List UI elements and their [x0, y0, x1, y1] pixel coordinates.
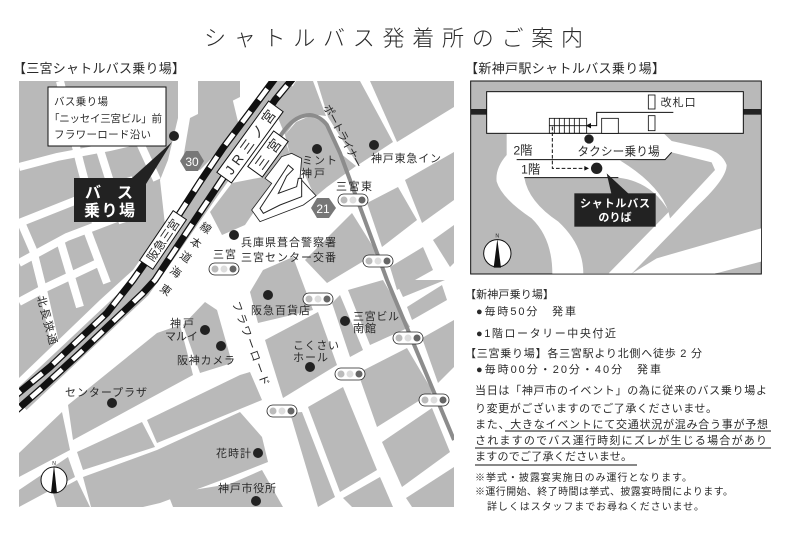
shuttle stop label: シャトルバス — [580, 197, 650, 210]
map labels: ポートライナー — [320, 102, 365, 170]
label: 1st floor: 1階 — [521, 163, 540, 177]
map labels: 神戸市役所 — [218, 481, 276, 495]
map labels: 三宮センター交番 — [241, 251, 336, 264]
callout: bus stop address: フラワーロード沿い — [54, 129, 151, 141]
label: 2nd floor: 2階 — [513, 143, 533, 157]
compass: Sannomiya map: N — [52, 461, 56, 467]
underlines — [475, 431, 771, 465]
shuttle stop label: のりば — [598, 210, 632, 224]
route shield 30: 30 — [185, 155, 199, 169]
text block: timetable and notes: ※運行開始、終了時間は挙式、披露宴時間によります。 — [475, 485, 733, 498]
text block: timetable and notes: 詳しくはスタッフまでお尋ねくださいませ。 — [487, 500, 704, 513]
bus stop label: 乗り場 — [84, 202, 135, 220]
text block: timetable and notes: 【三宮乗り場】各三宮駅より北側へ徒歩 2 分 — [465, 346, 702, 360]
text block: timetable and notes: 当日は「神戸市のイベント」の為に従来のバス乗り場よ — [475, 383, 767, 397]
route arrow: stairs to bus stop — [552, 127, 589, 171]
bus stop label: バ ス — [85, 185, 133, 202]
map labels: 神戸 — [301, 166, 325, 180]
title: シャトルバス発着所のご案内 — [204, 26, 583, 51]
station box: Hankyu Sannomiya: 阪急三宮 — [143, 216, 183, 264]
central island — [524, 178, 669, 274]
panel: Shin-Kobe map — [471, 81, 761, 274]
port liner track — [278, 115, 454, 440]
route shield 30 — [180, 151, 204, 171]
dot: taxi stand — [584, 134, 594, 144]
callout: bus stop address — [48, 87, 166, 146]
traffic signals — [209, 194, 449, 417]
text block: timetable and notes: されますのでバス運行時刻にズレが生じる場合があり — [475, 433, 767, 447]
railway lines — [10, 77, 294, 416]
text block: timetable and notes: ●毎時00分・20分・40分 発車 — [476, 362, 661, 376]
building inner outline — [260, 165, 302, 213]
map labels: マルイ — [165, 331, 198, 343]
compass: Shin-Kobe map: N — [495, 234, 499, 240]
text block: timetable and notes: ますのでご了承くださいませ。 — [475, 449, 632, 463]
text block: timetable and notes: また、大きなイベントにて交通状況が混み合う事が予想 — [475, 417, 768, 431]
map labels: ミント — [302, 155, 337, 167]
map labels: 花時計 — [216, 446, 251, 460]
text block: timetable and notes: ●1階ロータリー中央付近 — [476, 327, 616, 340]
map labels: センタープラザ — [65, 386, 147, 399]
pointer to shuttle stop — [607, 173, 630, 195]
map labels: 三宮 — [213, 248, 236, 261]
map labels: 阪神カメラ — [177, 353, 235, 367]
map labels: 三宮東 — [336, 180, 372, 193]
station box: Hankyu Sannomiya — [140, 211, 186, 269]
rail bars — [471, 109, 761, 115]
compass: Shin-Kobe map — [484, 234, 511, 268]
text block: timetable and notes: り変更がございますのでご了承くださいませ。 — [475, 401, 717, 415]
map labels: 三宮ビル — [353, 310, 399, 323]
heading: Sannomiya map: 【三宮シャトルバス乗り場】 — [13, 61, 185, 76]
station box: JR Sannomiya: JR三ノ宮 — [222, 107, 279, 177]
callout: bus stop address: 「ニッセイ三宮ビル」前 — [49, 112, 162, 125]
bus stop label — [74, 178, 146, 222]
text block: timetable and notes — [465, 287, 768, 513]
route arrow: concourse to stairs — [586, 112, 673, 128]
map labels: 阪急百貨店 — [251, 303, 310, 317]
label: taxi stand: タクシー乗り場 — [577, 145, 660, 159]
railway embankment — [19, 81, 285, 402]
compass: Sannomiya map — [41, 461, 67, 493]
text block: timetable and notes: ※挙式・披露宴実施日のみ運行となります。 — [475, 471, 692, 484]
map labels: 神戸東急イン — [371, 151, 441, 165]
heading: Shin-Kobe map: 【新神戸駅シャトルバス乗り場】 — [465, 61, 665, 76]
station box: Sannomiya: 三宮 — [252, 136, 284, 172]
map labels: ホール — [293, 351, 328, 364]
dot: shuttle bus stop — [591, 163, 602, 174]
map labels: こくさい — [293, 339, 339, 352]
map labels: フラワーロード — [229, 300, 272, 390]
map labels: 北長狭通 — [34, 294, 60, 346]
station building — [487, 92, 743, 133]
bus stop pointer — [132, 142, 172, 184]
stairs — [549, 118, 587, 133]
level divider — [517, 152, 672, 160]
route shield 21 — [311, 198, 336, 218]
map labels — [34, 102, 441, 495]
route shield 21: 21 — [316, 202, 330, 216]
map labels: 兵庫県葺合警察署 — [241, 235, 336, 249]
station box: Sannomiya — [248, 131, 288, 177]
white roads — [496, 134, 761, 274]
panel: Sannomiya map — [10, 77, 454, 508]
map labels: 神戸 — [170, 316, 194, 330]
landmark dots — [107, 131, 379, 506]
map labels: 南館 — [353, 322, 376, 335]
text block: timetable and notes: 【新神戸乗り場】 — [465, 287, 554, 301]
right island — [620, 152, 715, 218]
shuttle stop label — [574, 193, 656, 227]
callout: bus stop address: バス乗り場 — [54, 95, 108, 108]
map labels: 東海道本線 — [157, 220, 214, 299]
station building — [252, 153, 316, 222]
text block: timetable and notes: ●毎時50分 発車 — [476, 304, 576, 318]
label: ticket gate: 改札口 — [661, 96, 696, 109]
building details — [602, 95, 655, 133]
